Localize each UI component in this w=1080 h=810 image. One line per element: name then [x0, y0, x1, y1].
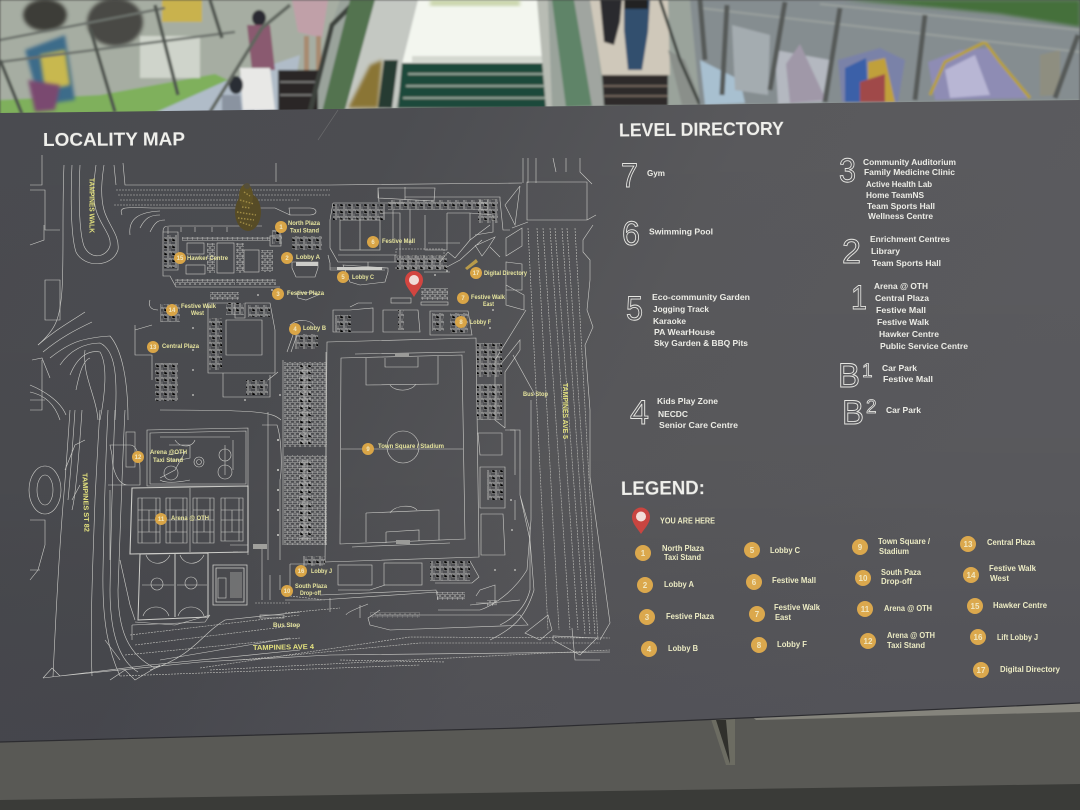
legend labels: Taxi Stand	[887, 641, 925, 650]
level 3: 3	[839, 152, 856, 190]
legend number circles: 13	[964, 540, 973, 549]
signage board	[0, 100, 1080, 742]
map marker labels: Festive Walk	[471, 294, 505, 301]
road labels: TAMPINES AVE 5	[561, 383, 568, 439]
level B1: 1	[862, 361, 873, 382]
legend labels: South Paza	[881, 568, 922, 577]
legend labels: Festive Walk	[989, 564, 1037, 573]
level B2	[842, 394, 921, 432]
numbered map markers: 7	[461, 296, 465, 302]
heading: level directory: LEVEL DIRECTORY	[619, 119, 784, 140]
map marker labels: Lobby F	[470, 319, 491, 326]
legend number circles: 11	[861, 605, 870, 614]
level 6	[622, 215, 713, 253]
level 3: Active Health Lab	[866, 179, 932, 189]
legend number circles: 14	[967, 571, 976, 580]
map marker labels: Digital Directory	[484, 270, 527, 277]
map marker labels: Arena @ OTH	[171, 515, 209, 522]
icon: legend pin	[632, 508, 650, 534]
level B1: Festive Mall	[883, 374, 933, 384]
right handrail	[668, 50, 702, 105]
legend labels: Lobby B	[668, 644, 698, 653]
legend labels: Taxi Stand	[664, 553, 701, 562]
level 3: Home TeamNS	[866, 190, 924, 200]
numbered map markers: 12	[135, 455, 142, 461]
numbered map markers: 4	[293, 327, 297, 333]
legend labels: Stadium	[879, 547, 909, 556]
legend number circles: 12	[864, 637, 873, 646]
plaza dots	[192, 269, 516, 571]
arena tennis courts	[130, 486, 248, 554]
road labels: Bus Stop	[523, 391, 548, 398]
legend labels: West	[990, 574, 1009, 583]
festive mall block	[328, 187, 510, 285]
map marker labels: Festive Walk	[181, 303, 216, 310]
level 4: NECDC	[658, 409, 688, 419]
green balustrade left	[322, 0, 375, 112]
south plaza lift lobby block	[255, 556, 340, 618]
road labels: Bus Stop	[273, 622, 300, 629]
map marker labels: Central Plaza	[162, 343, 199, 350]
level 4: Kids Play Zone	[657, 396, 718, 406]
panel: legend	[632, 508, 1061, 678]
legend labels: Hawker Centre	[993, 601, 1048, 610]
numbered map markers: 16	[298, 569, 305, 575]
legend number circles	[635, 536, 989, 678]
left atrium behind glass	[0, 0, 340, 115]
map marker labels: Drop-off	[300, 590, 322, 597]
level 2	[842, 233, 950, 271]
legend labels: Lift Lobby J	[997, 633, 1038, 642]
legend labels: Arena @ OTH	[884, 604, 932, 613]
legend number circles: 15	[971, 602, 980, 611]
map marker labels: Hawker Centre	[187, 255, 228, 262]
numbered map markers: 15	[177, 256, 184, 262]
you are here label: YOU ARE HERE	[660, 516, 716, 526]
central low-rise buildings	[135, 288, 472, 401]
level 5: Eco-community Garden	[652, 292, 750, 302]
right-hand avenue lines	[490, 158, 610, 660]
numbered map markers: 5	[341, 275, 345, 281]
level 6: Swimming Pool	[649, 226, 713, 236]
stadium pitch	[325, 338, 479, 562]
level 5: 5	[626, 290, 643, 328]
level 4: Senior Care Centre	[659, 420, 738, 430]
legend labels: East	[775, 613, 791, 622]
map marker labels: North Plaza	[288, 220, 320, 227]
level B1: B	[838, 357, 860, 395]
map marker labels: Taxi Stand	[290, 228, 319, 234]
central escalator steps	[398, 63, 548, 108]
numbered map markers: 9	[366, 447, 370, 453]
numbered map markers: 11	[158, 517, 165, 523]
level B1	[838, 357, 933, 395]
map marker labels: Taxi Stand	[153, 457, 183, 464]
level 1: Arena @ OTH	[874, 281, 928, 291]
heading: legend: LEGEND:	[621, 478, 705, 500]
map marker labels: Lobby A	[296, 254, 320, 261]
numbered map markers: 14	[169, 308, 176, 314]
panel: level directory list	[621, 152, 968, 432]
legend number circles: 16	[974, 633, 983, 642]
numbered map markers: 13	[150, 345, 157, 351]
legend number circles: 10	[859, 574, 868, 583]
legend number circles: 3	[645, 613, 650, 622]
map marker labels: South Plaza	[295, 583, 327, 590]
road labels	[81, 178, 568, 652]
legend labels: Festive Walk	[774, 603, 821, 612]
numbered map markers: 10	[284, 589, 291, 595]
legend number circles: 8	[757, 641, 762, 650]
map marker labels: Arena @OTH	[150, 449, 187, 456]
map marker labels: Lobby J	[311, 568, 332, 575]
level B2: Car Park	[886, 405, 921, 415]
level 3: Team Sports Hall	[867, 201, 935, 211]
level B2: 2	[866, 397, 877, 418]
level 2: Team Sports Hall	[872, 258, 941, 268]
map marker labels: Festive Plaza	[287, 290, 324, 297]
level 1: 1	[851, 279, 867, 317]
road labels: TAMPINES ST 82	[81, 473, 90, 532]
numbered map markers: 17	[473, 271, 480, 277]
legend number circles: 6	[752, 578, 757, 587]
heading: locality map: LOCALITY MAP	[43, 129, 185, 150]
road network lines	[29, 155, 610, 680]
level 5	[626, 290, 750, 348]
legend labels: Lobby F	[777, 640, 807, 649]
numbered map markers	[132, 221, 482, 597]
towers beside stadium	[160, 343, 531, 630]
map marker labels: Lobby C	[352, 274, 374, 281]
legend labels: North Plaza	[662, 544, 705, 553]
road labels: TAMPINES AVE 4	[253, 644, 314, 652]
hawker centre block	[163, 208, 322, 300]
legend labels	[662, 537, 1061, 674]
legend labels: Digital Directory	[1000, 665, 1061, 674]
level 4	[630, 394, 738, 432]
legend labels: Festive Plaza	[666, 612, 715, 621]
right balustrade	[537, 0, 552, 108]
numbered map markers: 8	[459, 320, 463, 326]
level B1: Car Park	[882, 363, 917, 373]
legend number circles: 9	[858, 543, 863, 552]
map marker labels: Lobby B	[303, 325, 326, 332]
legend number circles: 5	[750, 546, 755, 555]
bright escalator landing	[402, 0, 546, 64]
right wall and graffiti	[690, 0, 1080, 105]
numbered map markers: 3	[276, 292, 280, 298]
level 1: Public Service Centre	[880, 341, 968, 351]
level 3: Family Medicine Clinic	[864, 167, 955, 177]
level 3: Wellness Centre	[868, 211, 933, 221]
level 5: PA WearHouse	[654, 327, 715, 337]
concrete ledge below board	[0, 690, 1080, 810]
map marker labels	[150, 220, 527, 597]
legend labels: Festive Mall	[772, 576, 816, 585]
legend labels: Town Square /	[878, 537, 931, 546]
map marker labels: East	[483, 301, 495, 308]
level 1: Hawker Centre	[879, 329, 939, 339]
level 4: 4	[630, 394, 649, 432]
level 1	[851, 279, 968, 351]
legend labels: Arena @ OTH	[887, 631, 935, 640]
level 1: Festive Mall	[876, 305, 926, 315]
level 2: Library	[871, 246, 900, 256]
arena basketball court	[147, 428, 248, 486]
numbered map markers: 1	[279, 225, 283, 231]
numbered map markers: 6	[371, 240, 375, 246]
road labels: TAMPINES WALK	[88, 178, 94, 233]
right stairs with walkers	[590, 0, 670, 106]
numbered map markers: 2	[285, 256, 289, 262]
level 7: Gym	[647, 168, 665, 178]
legend number circles: 17	[977, 666, 986, 675]
locality map drawing	[29, 155, 610, 680]
legend number circles: 4	[647, 645, 652, 654]
people on left escalator	[222, 0, 328, 112]
level 3	[839, 152, 956, 221]
level 5: Karaoke	[653, 316, 686, 326]
level 2: 2	[842, 233, 861, 271]
legend labels: Lobby A	[664, 580, 694, 589]
legend number circles: 1	[641, 549, 646, 558]
legend labels: Drop-off	[881, 577, 912, 586]
level 3: Community Auditorium	[863, 157, 956, 167]
level 1: Central Plaza	[875, 293, 929, 303]
map marker labels: Town Square / Stadium	[378, 443, 444, 450]
map marker labels: West	[191, 310, 205, 317]
level 7: 7	[621, 157, 638, 195]
level 7	[621, 157, 665, 195]
arena futsal courts	[132, 544, 270, 640]
level 2: Enrichment Centres	[870, 234, 950, 244]
legend labels: Lobby C	[770, 546, 800, 555]
legend number circles: 7	[755, 610, 760, 619]
legend number circles: 2	[643, 581, 648, 590]
legend labels: Central Plaza	[987, 538, 1036, 547]
icon: you are here pin on map	[405, 271, 423, 297]
level 5: Sky Garden & BBQ Pits	[654, 338, 748, 348]
level 5: Jogging Track	[653, 304, 709, 314]
map marker labels: Festive Mall	[382, 238, 415, 245]
level 1: Festive Walk	[877, 317, 929, 327]
level 6: 6	[622, 215, 640, 253]
photo: mall escalators above the board	[0, 0, 1080, 120]
level B2: B	[842, 394, 864, 432]
left escalator handrails	[210, 5, 290, 112]
bird dropping stain on board	[235, 183, 261, 231]
